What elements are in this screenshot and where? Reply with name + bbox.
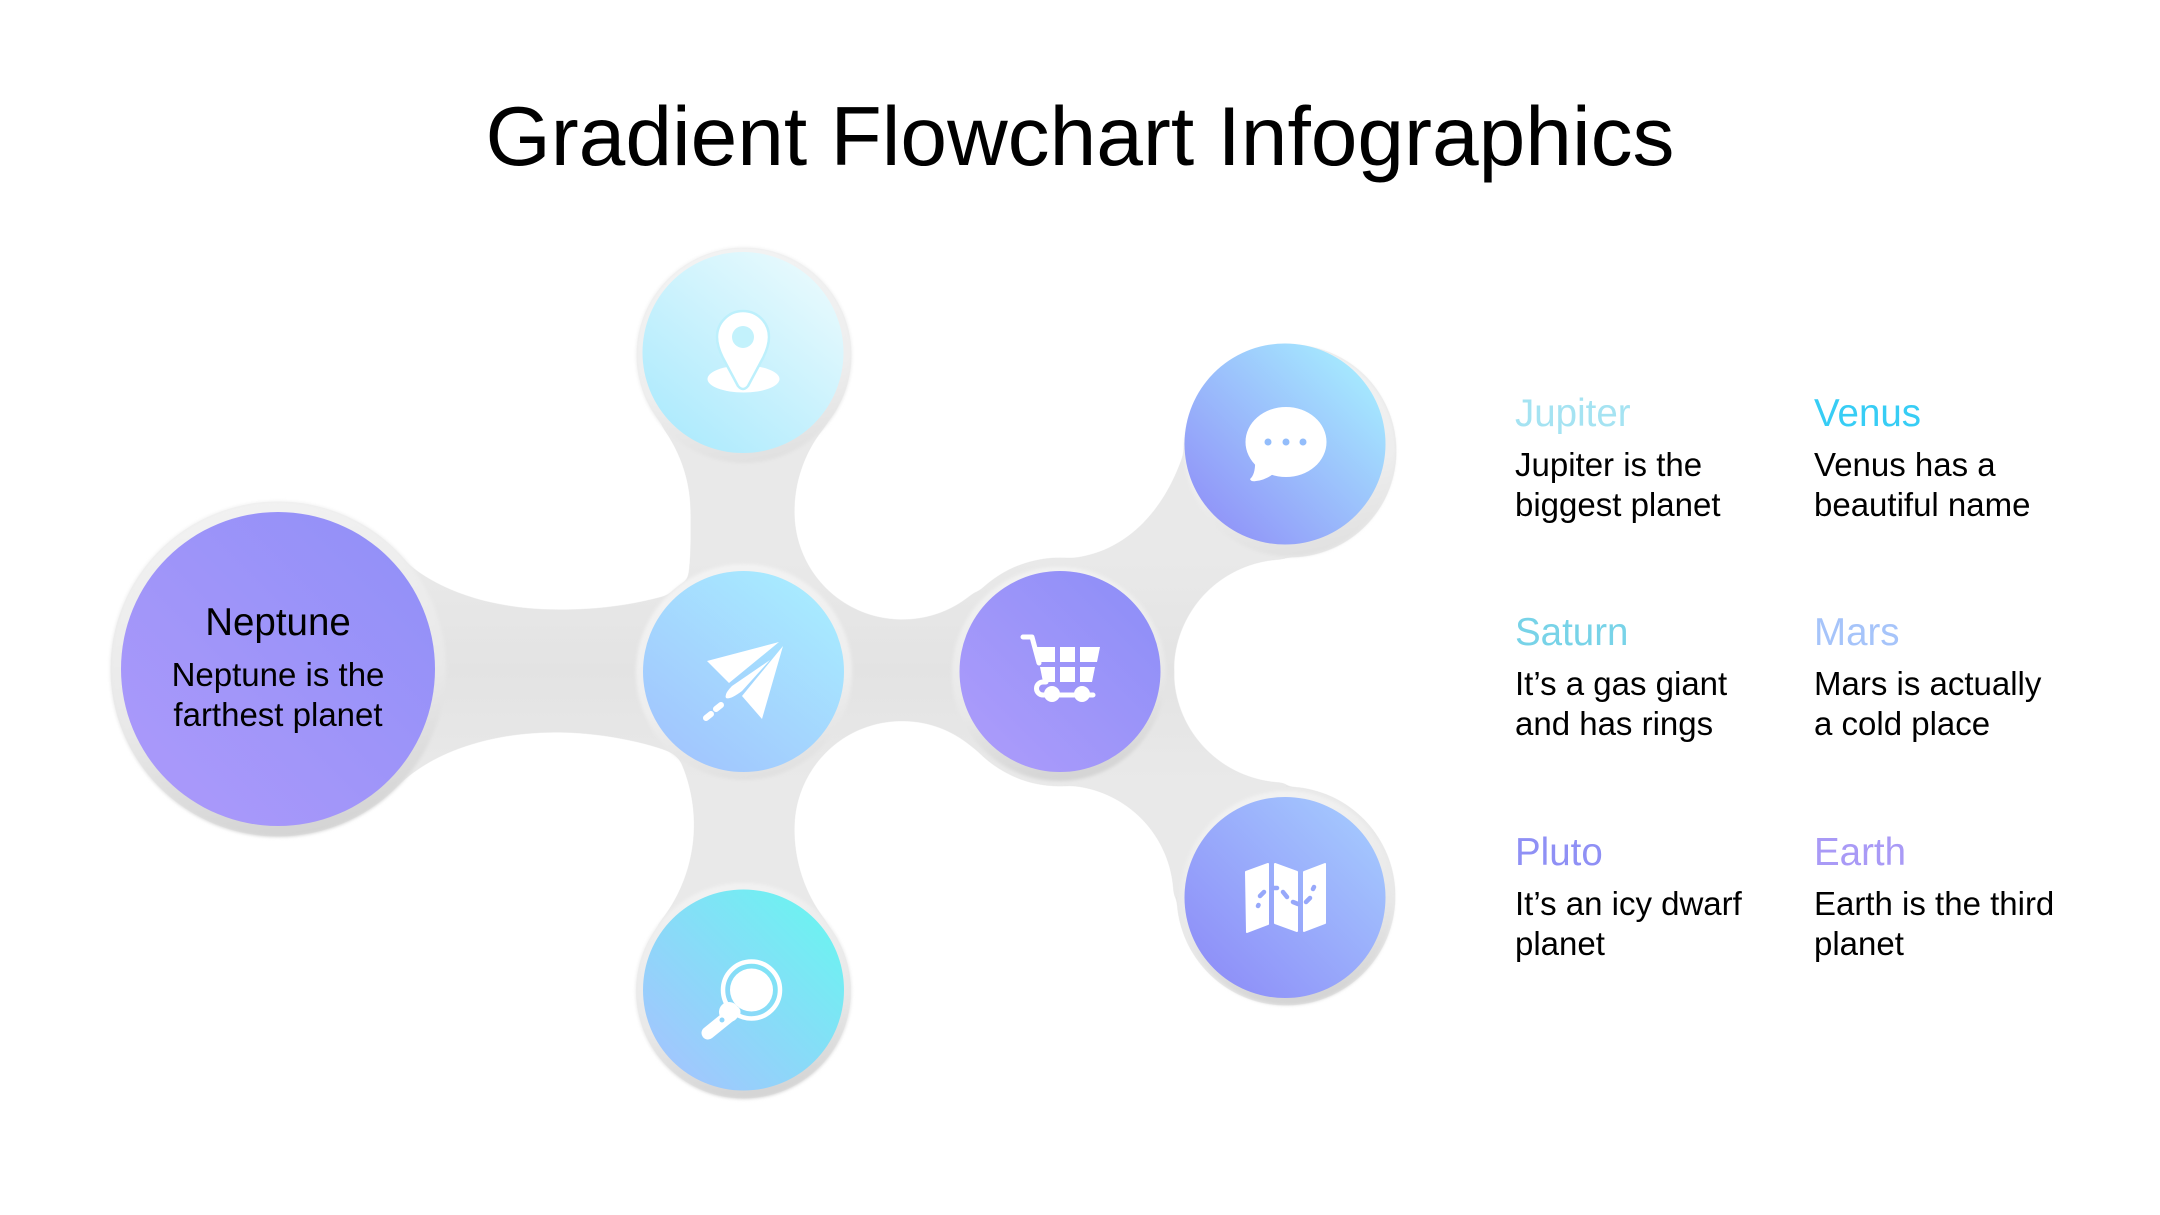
text block: Mars: Mars xyxy=(1814,611,1900,654)
icon: speech bubble xyxy=(1246,407,1326,481)
node: location pin xyxy=(636,247,852,463)
text block: Venus: Venus has a xyxy=(1814,446,1996,483)
node: Neptune xyxy=(110,501,446,837)
text block: Saturn: It’s a gas giant xyxy=(1515,665,1727,702)
Neptune description: Neptune is the xyxy=(172,656,384,693)
text block: Saturn xyxy=(1515,611,1727,742)
text block: Jupiter: biggest planet xyxy=(1515,486,1720,523)
text block: Pluto: It’s an icy dwarf xyxy=(1515,885,1743,922)
text block: Jupiter: Jupiter is the xyxy=(1515,446,1702,483)
text block: Pluto xyxy=(1515,831,1743,962)
node: chat xyxy=(1184,344,1396,556)
icon: folded map xyxy=(1246,864,1325,932)
Neptune heading: Neptune xyxy=(205,601,351,644)
title: Gradient Flowchart Infographics xyxy=(485,89,1675,183)
text block: Jupiter xyxy=(1515,392,1720,523)
icon: shopping cart xyxy=(1023,637,1100,702)
text block: Venus xyxy=(1814,392,2030,523)
text block: Venus: Venus xyxy=(1814,392,1921,435)
Neptune description: farthest planet xyxy=(173,696,383,733)
text block: Jupiter: Jupiter xyxy=(1515,392,1631,435)
icon: location pin xyxy=(708,311,780,392)
text block: Saturn: Saturn xyxy=(1515,611,1628,654)
text block: Pluto: planet xyxy=(1515,925,1605,962)
text block: Earth: planet xyxy=(1814,925,1904,962)
node: search xyxy=(636,883,852,1099)
text block: Earth: Earth is the third xyxy=(1814,885,2054,922)
icon: paper plane xyxy=(706,642,783,719)
text block: Mars xyxy=(1814,611,2042,742)
text block: Mars: a cold place xyxy=(1814,705,1990,742)
flowchart connector background xyxy=(111,248,1396,1098)
node: map xyxy=(1180,791,1394,1005)
node: paper plane xyxy=(636,564,852,780)
icon: magnifying glass xyxy=(708,962,780,1033)
text block: Earth xyxy=(1814,831,2054,962)
text block: Pluto: Pluto xyxy=(1515,831,1603,874)
text block: Venus: beautiful name xyxy=(1814,486,2030,523)
node: shopping cart xyxy=(952,567,1166,781)
text block: Saturn: and has rings xyxy=(1515,705,1713,742)
text block: Mars: Mars is actually xyxy=(1814,665,2042,702)
text block: Earth: Earth xyxy=(1814,831,1906,874)
